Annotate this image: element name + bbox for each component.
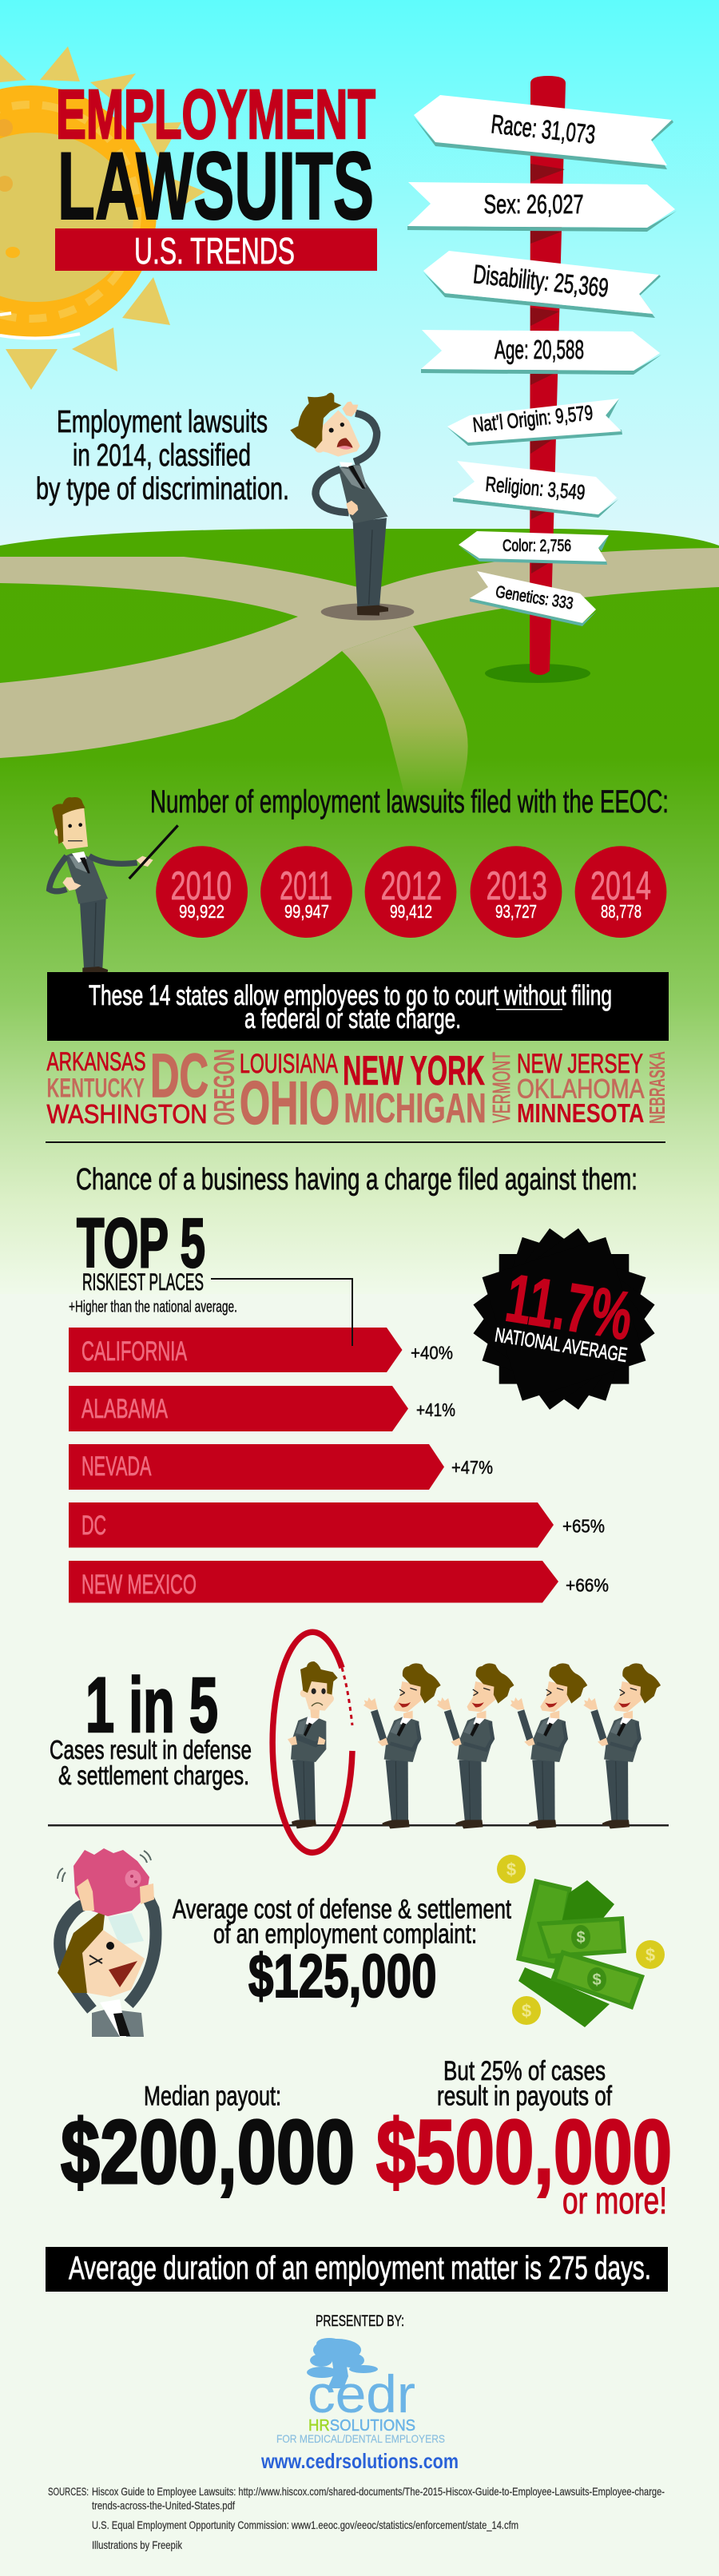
happy employee 3 (510, 1663, 587, 1828)
national average badge (473, 1228, 655, 1410)
money pile (497, 1855, 665, 2027)
sign: disability: Disability: 25,369 (472, 259, 610, 303)
state word cloud: KENTUCKY (46, 1073, 145, 1103)
sign: race: Race: 31,073 (490, 109, 597, 149)
confused businessman (290, 393, 414, 621)
intro text: in 2014, classified (73, 439, 251, 473)
sources: trends-across-the-United-States.pdf (92, 2499, 235, 2511)
bar: nevada (69, 1444, 493, 1490)
national average badge: NATIONAL AVERAGE (494, 1324, 629, 1367)
money pile: $ (646, 1945, 655, 1965)
bar: alabama: ALABAMA (81, 1394, 168, 1424)
state word cloud: DC (150, 1042, 209, 1110)
year circles: 2013 (486, 863, 547, 908)
connector line (211, 1279, 352, 1346)
cedr logo: cedr (308, 2364, 415, 2423)
intro text (36, 405, 289, 506)
1 in 5 text (50, 1661, 252, 1790)
title: U.S. TRENDS (134, 230, 295, 272)
quarter of cases payout: result in payouts of (437, 2082, 612, 2112)
bar: dc (69, 1502, 605, 1548)
signpost pole (485, 76, 590, 683)
1 in 5 text: 1 in 5 (85, 1661, 218, 1748)
ground with roads (0, 529, 719, 1294)
year circles: 2011 (280, 863, 332, 908)
sign: age (421, 330, 661, 375)
money pile: $ (576, 1929, 586, 1947)
cedr logo (276, 2338, 445, 2445)
black banner: 14 states: a federal or state charge. (244, 1003, 461, 1034)
1 in 5 text: & settlement charges. (58, 1760, 249, 1790)
median payout: $200,000 (61, 2102, 355, 2202)
median payout: Median payout: (144, 2082, 281, 2112)
presented by: PRESENTED BY: (316, 2313, 404, 2330)
website: www.cedrsolutions.com (260, 2449, 459, 2473)
money pile: $ (506, 1860, 516, 1879)
bar: california: CALIFORNIA (81, 1336, 187, 1367)
sun (0, 46, 205, 390)
title: EMPLOYMENT (56, 76, 375, 153)
happy employee 1 (363, 1663, 441, 1828)
average cost text: $125,000 (248, 1943, 436, 2010)
title (55, 76, 377, 272)
intro text: Employment lawsuits (57, 405, 268, 439)
top 5 heading: +Higher than the national average. (69, 1299, 237, 1316)
year circles: 88,778 (601, 901, 642, 922)
top 5 heading (69, 1205, 237, 1316)
sources: SOURCES: (48, 2485, 89, 2498)
state word cloud: MICHIGAN (344, 1086, 486, 1132)
bar: new mexico: NEW MEXICO (81, 1570, 197, 1600)
sign: color (459, 531, 609, 565)
year circles: 99,412 (390, 901, 432, 922)
state word cloud: NEBRASKA (645, 1051, 669, 1124)
quarter of cases payout: or more! (562, 2179, 667, 2221)
year circles: 99,947 (284, 901, 329, 922)
average cost text: Average cost of defense & settlement (173, 1894, 511, 1924)
money pile: $ (592, 1971, 602, 1989)
year circles: 2012 (380, 863, 442, 908)
bar: dc: +65% (562, 1516, 605, 1537)
bar: nevada: +47% (451, 1457, 493, 1478)
year circles: 2010 (171, 863, 232, 908)
money pile: $ (522, 2001, 531, 2021)
red circle around the one (272, 1632, 352, 1852)
black banner: 14 states (47, 972, 669, 1041)
cedr logo: FOR MEDICAL/DENTAL EMPLOYERS (276, 2432, 445, 2445)
sign: religion: Religion: 3,549 (485, 472, 586, 504)
national average badge: 11.7% (501, 1260, 638, 1355)
state word cloud: OKLAHOMA (517, 1074, 645, 1104)
title: LAWSUITS (58, 133, 374, 240)
man with empty piggy bank (58, 1848, 156, 2037)
bar: california (69, 1328, 453, 1372)
bar: new mexico (69, 1561, 609, 1602)
sad employee (288, 1661, 338, 1828)
1 in 5 text: Cases result in defense (50, 1735, 252, 1764)
sign: sex (407, 182, 677, 232)
bar: alabama (69, 1386, 455, 1431)
sign: disability (423, 251, 661, 318)
background sky (0, 0, 719, 575)
intro text: by type of discrimination. (36, 472, 289, 506)
state word cloud (46, 1042, 669, 1137)
sign: age: Age: 20,588 (495, 335, 584, 364)
median payout (61, 2082, 355, 2202)
sign: color: Color: 2,756 (503, 537, 571, 555)
state word cloud: ARKANSAS (46, 1047, 145, 1076)
quarter of cases payout (376, 2056, 672, 2221)
state word cloud: LOUISIANA (240, 1049, 338, 1079)
state word cloud: OREGON (208, 1049, 240, 1125)
happy employee 4 (583, 1663, 661, 1828)
sources: Illustrations by Freepik (92, 2538, 183, 2551)
sign: sex: Sex: 26,027 (484, 189, 583, 219)
cedr logo: HRSOLUTIONS (308, 2417, 415, 2435)
top 5 heading: TOP 5 (77, 1205, 205, 1282)
happy employee 2 (437, 1663, 514, 1828)
year circles: 99,922 (179, 901, 224, 922)
businessman with pointer (50, 797, 178, 974)
lower page background (0, 1278, 719, 2576)
year circles (156, 846, 666, 938)
bar: dc: DC (81, 1510, 106, 1541)
state word cloud: MINNESOTA (517, 1098, 644, 1128)
sources: U.S. Equal Employment Opportunity Commission: www1.eeoc.gov/eeoc/statistics/enforcement/state_14.cfm (92, 2518, 518, 2531)
state word cloud: VERMONT (487, 1052, 515, 1123)
bar: alabama: +41% (416, 1399, 455, 1420)
sign: religion (453, 461, 618, 518)
sign: genetics: Genetics: 333 (495, 582, 574, 613)
bar: california: +40% (411, 1342, 453, 1363)
sign: national origin (447, 399, 622, 446)
top 5 heading: RISKIEST PLACES (82, 1269, 204, 1296)
sign: race (414, 95, 673, 169)
year circles: 2014 (590, 863, 651, 908)
sources (48, 2485, 665, 2551)
state word cloud: OHIO (240, 1070, 340, 1137)
quarter of cases payout: But 25% of cases (443, 2056, 606, 2086)
state word cloud: NEW YORK (343, 1048, 485, 1094)
sign: national origin: Nat’l Origin: 9,579 (471, 400, 594, 437)
average cost text: of an employment complaint: (213, 1919, 477, 1949)
state word cloud: NEW JERSEY (517, 1049, 643, 1079)
year circles: 93,727 (495, 901, 537, 922)
sign: genetics (470, 571, 597, 626)
bar: nevada: NEVADA (81, 1451, 152, 1482)
average cost text (173, 1894, 511, 2010)
bar: new mexico: +66% (566, 1575, 609, 1596)
state word cloud: WASHINGTON (46, 1099, 208, 1129)
